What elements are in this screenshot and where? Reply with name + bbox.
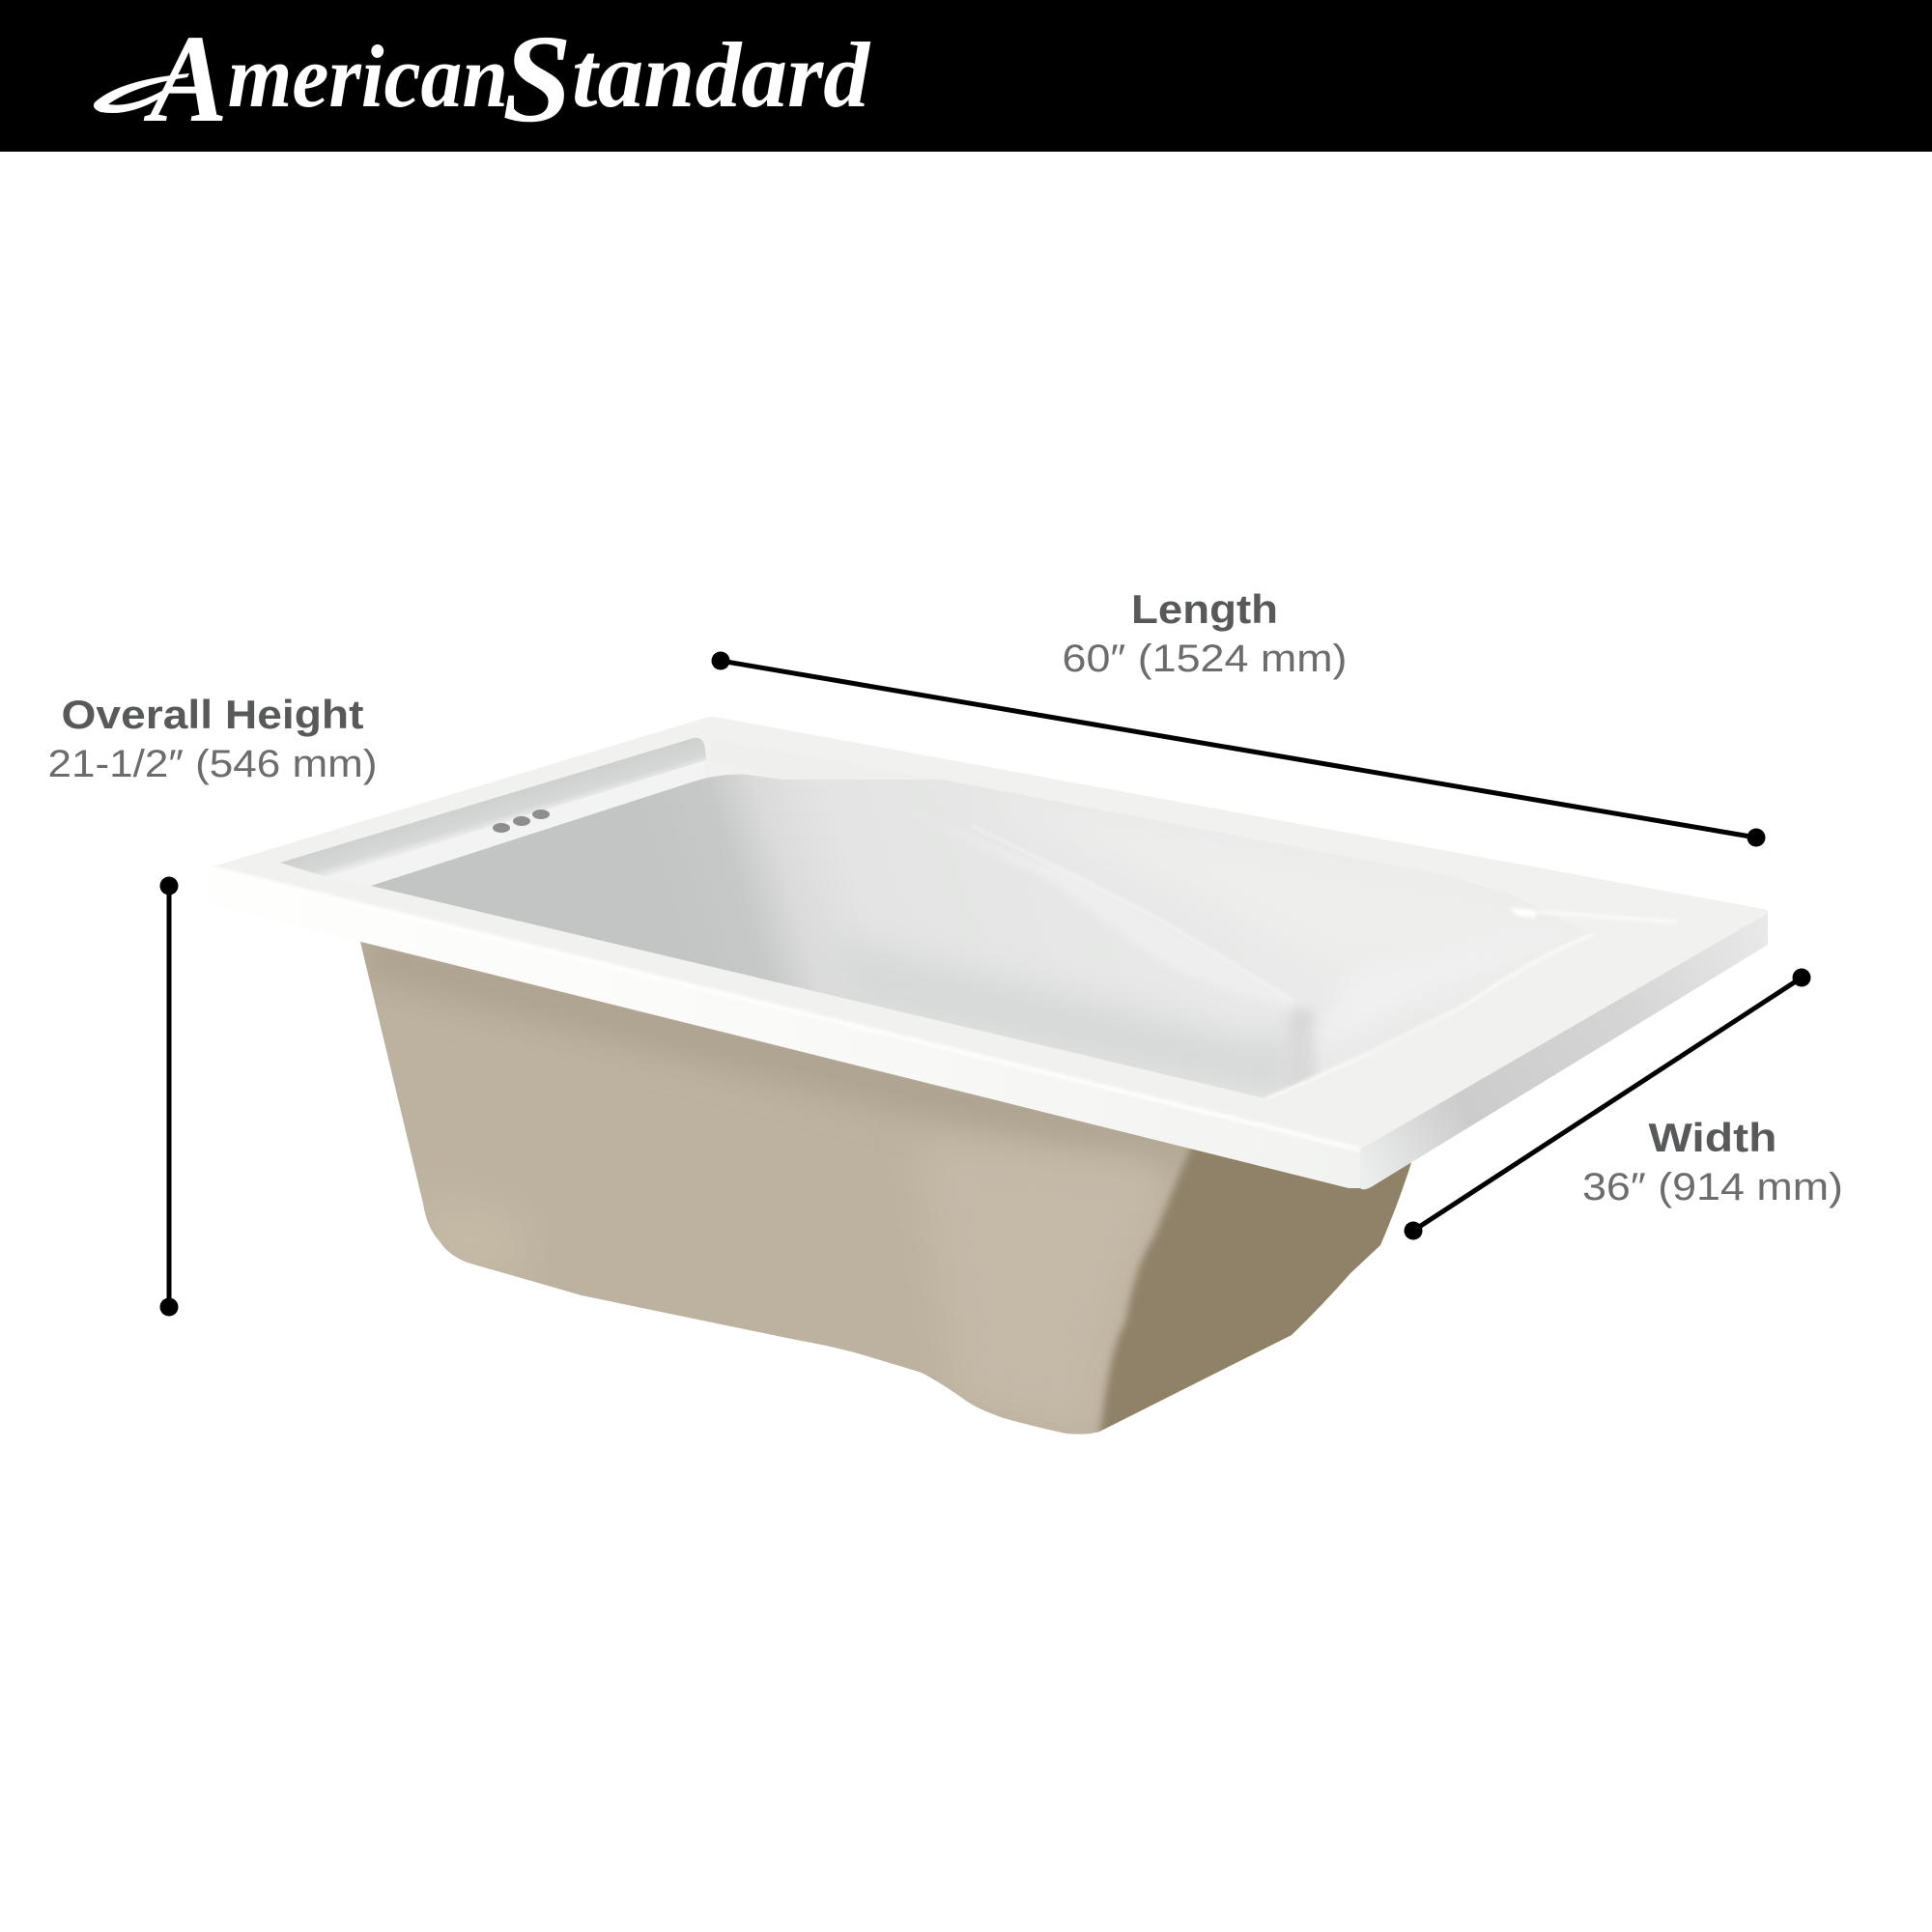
left deck recess <box>280 738 706 877</box>
rim front highlight <box>210 867 1360 1150</box>
label: width <box>1582 1115 1843 1208</box>
label: length: Length <box>1131 586 1278 632</box>
label: overall height <box>48 692 377 785</box>
brand logo wordmark: tandard <box>572 23 871 127</box>
label: width: Width <box>1648 1115 1777 1160</box>
brand logo wordmark: merican <box>228 27 508 126</box>
brand logo wordmark: A <box>150 10 234 149</box>
bathtub illustration <box>207 717 1768 1439</box>
header banner <box>0 0 1932 152</box>
brand logo wordmark <box>94 10 871 149</box>
overall height dimension line <box>160 877 178 1316</box>
rim front face <box>207 867 1364 1188</box>
label: width: 36″ (914 mm) <box>1582 1166 1843 1208</box>
left deck strip <box>327 760 706 886</box>
backrest contour <box>870 795 1294 1008</box>
rim side face <box>1360 909 1768 1189</box>
label: length <box>1063 586 1347 680</box>
brand logo wordmark: S <box>502 10 572 149</box>
label: overall height: Overall Height <box>62 692 363 737</box>
right end highlights <box>1510 908 1677 922</box>
basin interior <box>371 775 1343 1098</box>
tub outer shell <box>357 942 1425 1439</box>
length dimension line <box>711 651 1766 846</box>
back deck step <box>710 738 1679 918</box>
width dimension line <box>1405 968 1810 1240</box>
label: length: 60″ (1524 mm) <box>1063 638 1347 680</box>
faucet holes <box>493 810 550 833</box>
label: overall height: 21-1/2″ (546 mm) <box>48 743 377 785</box>
basin right edge <box>1265 934 1593 1098</box>
rim top deck <box>210 717 1768 1150</box>
